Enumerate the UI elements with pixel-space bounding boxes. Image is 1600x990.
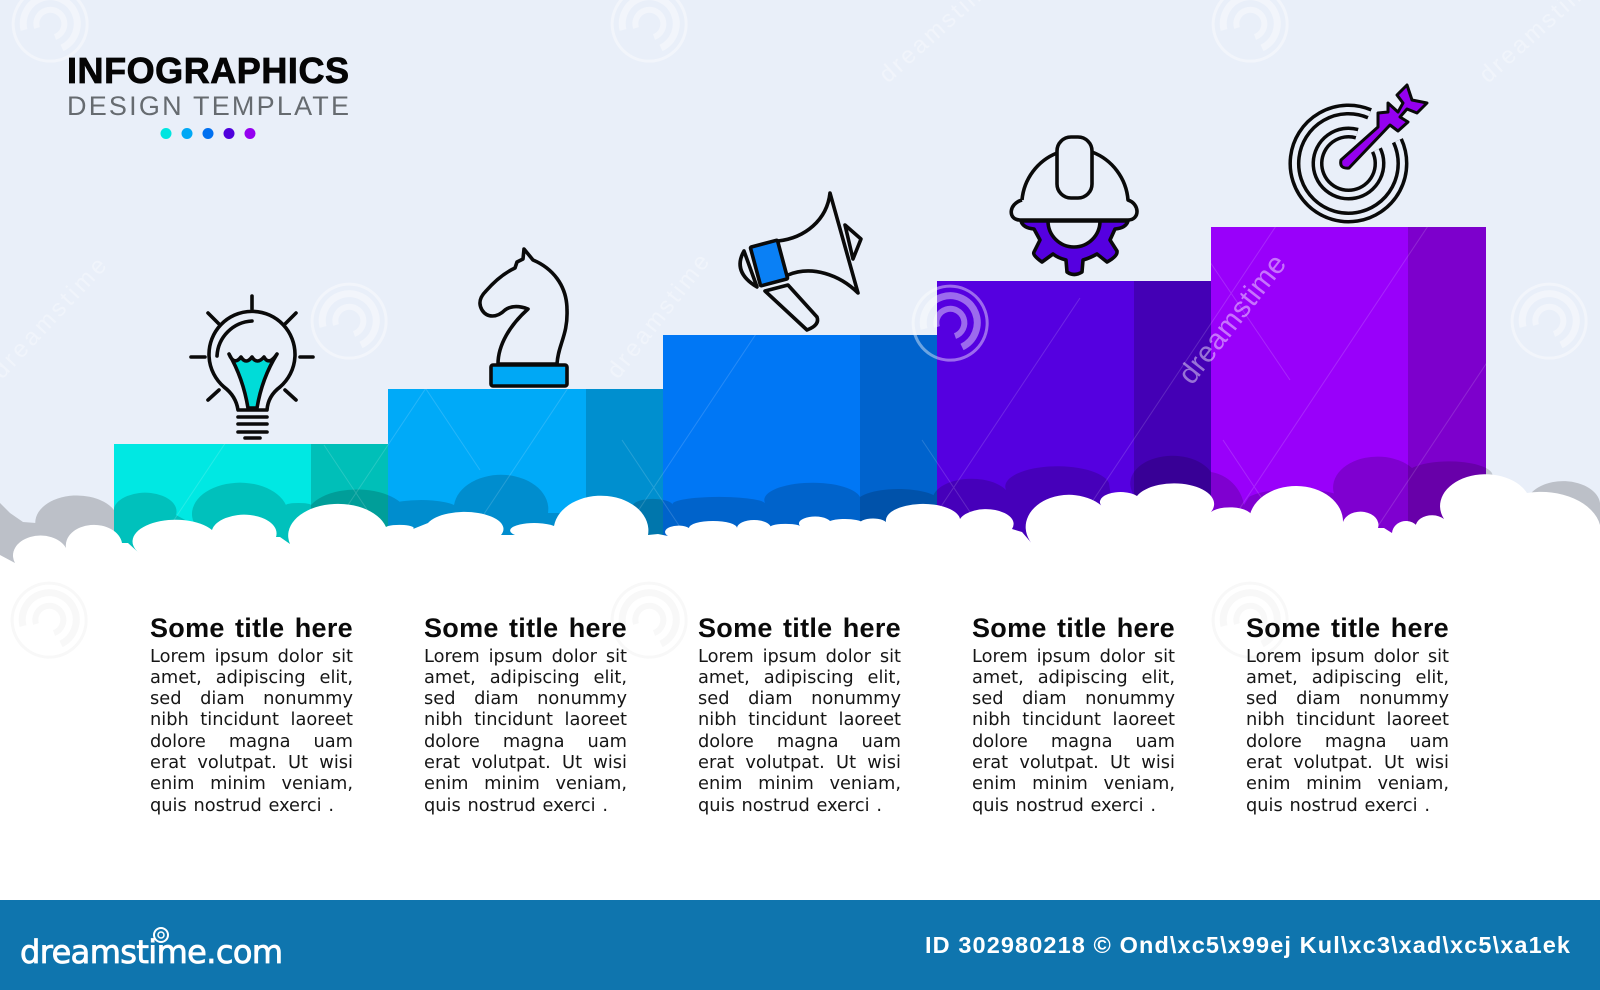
watermark over steps: dreamstime [1172, 248, 1293, 390]
step 3 bar [663, 335, 937, 600]
icon: megaphone [740, 193, 861, 330]
text block: step 2 [424, 613, 627, 816]
text block: step 1: erat volutpat. Ut wisi [150, 752, 353, 773]
icon: target with arrow [1294, 85, 1427, 217]
text block: step 5 [1246, 613, 1449, 816]
text block: step 5: erat volutpat. Ut wisi [1246, 752, 1449, 773]
footer logo: dreamstime.com [20, 933, 283, 971]
text block: step 5: Lorem ipsum dolor sit [1246, 646, 1449, 666]
text block: step 3: sed diam nonummy [698, 688, 901, 709]
cloud shadows on bars [114, 456, 1493, 600]
text block: step 5: amet, adipiscing elit, [1246, 667, 1449, 688]
text block: step 3: nibh tincidunt laoreet [698, 709, 901, 730]
text block: step 3: Lorem ipsum dolor sit [698, 646, 901, 666]
text block: step 4: amet, adipiscing elit, [972, 667, 1175, 688]
text block: step 1: quis nostrud exerci . [150, 795, 334, 816]
step 5 bar [1211, 227, 1486, 600]
watermark over steps [0, 0, 1600, 390]
subheading: DESIGN TEMPLATE [67, 91, 349, 121]
step 1 bar [114, 444, 388, 600]
text block: step 2: nibh tincidunt laoreet [424, 709, 627, 730]
title block [67, 50, 349, 139]
text block: step 3: dolore magna uam [698, 731, 901, 752]
faint watermark lines over bars [174, 227, 1486, 526]
text block: step 2: quis nostrud exerci . [424, 795, 608, 816]
text block: step 3: amet, adipiscing elit, [698, 667, 901, 688]
text block: step 2: dolore magna uam [424, 731, 627, 752]
text block: step 5: nibh tincidunt laoreet [1246, 709, 1449, 730]
icon: helmet with gear [1011, 137, 1137, 274]
text block: step 1: sed diam nonummy [150, 688, 353, 709]
text block: step 4 [972, 613, 1175, 816]
text block: step 3: erat volutpat. Ut wisi [698, 752, 901, 773]
text block: step 5: Some title here [1246, 613, 1449, 643]
text block: step 4: dolore magna uam [972, 731, 1175, 752]
text block: step 3: enim minim veniam, [698, 773, 901, 794]
text block: step 4: enim minim veniam, [972, 773, 1175, 794]
text block: step 1 [150, 613, 353, 816]
heading: INFOGRAPHICS [67, 50, 349, 91]
text block: step 4: sed diam nonummy [972, 688, 1175, 709]
white-area watermarks [12, 583, 1287, 657]
text block: step 1: dolore magna uam [150, 731, 353, 752]
text block: step 1: Lorem ipsum dolor sit [150, 646, 353, 666]
back clouds [0, 481, 1600, 600]
front cloud band [0, 474, 1600, 900]
text block: step 5: dolore magna uam [1246, 731, 1449, 752]
text block: step 1: amet, adipiscing elit, [150, 667, 353, 688]
text block: step 3 [698, 613, 901, 816]
watermark over steps: dreamstime [601, 249, 715, 384]
background watermarks [13, 0, 1586, 358]
footer credit: ID 302980218 © Ond\xc5\x99ej Kul\xc3\xad\xc5\xa1ek [925, 932, 1571, 958]
text block: step 2: erat volutpat. Ut wisi [424, 752, 627, 773]
bar chart: five rising steps [114, 227, 1486, 600]
text block: step 3: quis nostrud exerci . [698, 795, 882, 816]
text block: step 4: quis nostrud exerci . [972, 795, 1156, 816]
text block: step 5: quis nostrud exerci . [1246, 795, 1430, 816]
text block: step 2: Some title here [424, 613, 627, 643]
text block: step 5: enim minim veniam, [1246, 773, 1449, 794]
text block: step 1: nibh tincidunt laoreet [150, 709, 353, 730]
step 4 bar [937, 281, 1211, 600]
text block: step 3: Some title here [698, 613, 901, 643]
text block: step 4: erat volutpat. Ut wisi [972, 752, 1175, 773]
text block: step 2: Lorem ipsum dolor sit [424, 646, 627, 666]
text block: step 4: nibh tincidunt laoreet [972, 709, 1175, 730]
text block: step 2: amet, adipiscing elit, [424, 667, 627, 688]
text block: step 1: enim minim veniam, [150, 773, 353, 794]
text block: step 2: sed diam nonummy [424, 688, 627, 709]
icon: chess knight [480, 249, 567, 386]
icon: light bulb [191, 296, 313, 438]
footer bar [0, 900, 1600, 990]
colour dots [160, 128, 256, 139]
step 2 bar [388, 389, 663, 600]
text block: step 1: Some title here [150, 613, 353, 643]
text block: step 4: Some title here [972, 613, 1175, 643]
text block: step 2: enim minim veniam, [424, 773, 627, 794]
text block: step 5: sed diam nonummy [1246, 688, 1449, 709]
text block: step 4: Lorem ipsum dolor sit [972, 646, 1175, 666]
